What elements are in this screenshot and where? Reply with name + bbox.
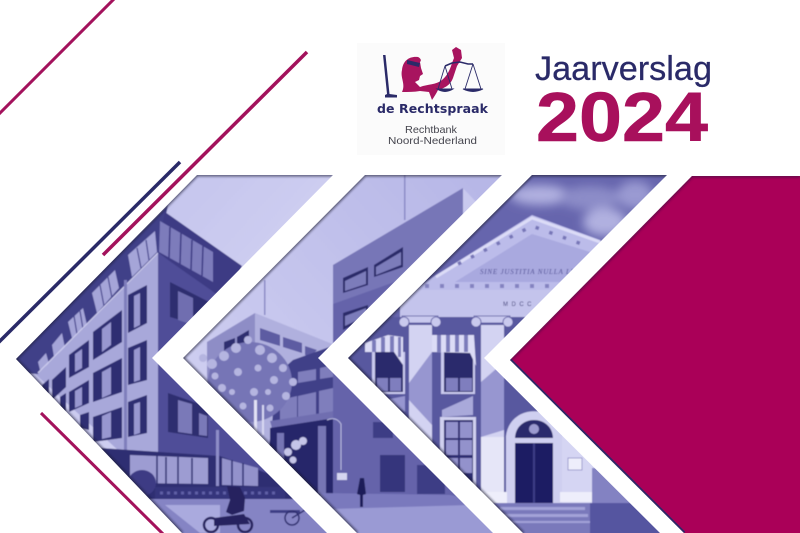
inscription: SINE JUSTITIA NULLA LIBERTAS [480, 268, 603, 276]
right dark bush [592, 468, 632, 504]
pediment [400, 215, 640, 315]
pavement [150, 499, 340, 533]
low building shaded side [207, 313, 255, 440]
panel fill [510, 176, 800, 533]
right facade [157, 252, 269, 475]
photo panel: court building with tree [183, 175, 502, 533]
low building lit side [254, 313, 332, 444]
canopy [270, 411, 335, 428]
pedestrian [357, 478, 366, 507]
upper windows [375, 352, 473, 392]
icon: scales [437, 62, 483, 92]
decorative line: navy [0, 162, 180, 343]
upper window lower panes [377, 378, 472, 391]
fanlight [515, 420, 553, 438]
title: Jaarverslag: Jaarverslag [535, 50, 712, 88]
wall sign [568, 458, 582, 470]
roof band [158, 212, 242, 300]
inner shadow [348, 175, 667, 533]
step treads [495, 507, 590, 523]
right lower window panes [178, 400, 207, 436]
ground floor glazing [130, 455, 208, 484]
glazing mullions [157, 456, 243, 486]
decorative line: long magenta [103, 52, 307, 255]
decorative line: lower magenta [41, 413, 163, 533]
arched doorway surround [506, 411, 562, 505]
garage door one [380, 455, 405, 492]
column bases [483, 492, 592, 503]
magenta chevron panel [510, 176, 800, 533]
low building windows [260, 328, 317, 357]
lower window [444, 420, 473, 492]
road shadow [270, 510, 300, 513]
striped awnings [365, 335, 403, 365]
courthouse photo content [340, 170, 680, 533]
tall building panes [345, 252, 401, 326]
bicycle [285, 510, 305, 525]
antenna two [264, 280, 266, 315]
inner shadow [183, 175, 502, 533]
entablature [400, 290, 640, 317]
date inscription: MDCC [503, 302, 535, 308]
steps [470, 503, 600, 533]
left facade window panes [75, 293, 140, 439]
dentil row [425, 284, 570, 288]
court photo content [183, 175, 502, 533]
logo wordmark: de Rechtspraak [377, 101, 489, 116]
structure upper windows [280, 365, 333, 421]
sky [340, 170, 680, 533]
roof glass mullions [169, 227, 203, 276]
door centre line [533, 443, 535, 503]
dormer glass [38, 231, 157, 370]
right upper window [170, 282, 208, 320]
ground floor band [100, 448, 293, 500]
left facade windows [42, 285, 147, 442]
wall light patches [442, 396, 473, 417]
fanlight centre [529, 424, 539, 434]
right wall [562, 430, 652, 505]
dormer mullions [74, 240, 149, 334]
wall sign [337, 473, 347, 480]
ground floor glazing right [222, 458, 258, 486]
street level [590, 503, 660, 533]
column shading [409, 352, 504, 437]
office photo content [0, 170, 340, 533]
hedge light speckle [160, 492, 278, 494]
tree [199, 336, 297, 440]
columns [409, 325, 504, 525]
downpipe [124, 280, 127, 455]
roof glass [159, 221, 213, 282]
left facade [36, 254, 158, 452]
clouds [510, 181, 653, 236]
inner shadow [16, 175, 333, 533]
photo panel: modern office building [0, 170, 340, 533]
photo panel: historic courthouse [340, 170, 680, 533]
pediment cornice [436, 218, 600, 277]
eave line [38, 253, 158, 373]
sky [30, 175, 333, 450]
cobbled ground [330, 505, 520, 533]
ground [320, 493, 520, 533]
door [515, 443, 553, 503]
logo subtitle line two: Noord-Nederland [388, 135, 477, 147]
scooter rider [204, 486, 252, 532]
tall building windows [343, 247, 403, 330]
panel navy lower edge [510, 360, 684, 533]
dark sphere bush [128, 470, 156, 496]
brick wall [340, 317, 640, 533]
left wall light patch [385, 396, 405, 412]
right lower window [168, 393, 208, 438]
sky [183, 175, 502, 382]
decorative line: top-left magenta [0, 0, 115, 115]
logo: de Rechtspraak [357, 43, 505, 155]
tall building upper [333, 188, 473, 310]
icon: blindfold [407, 60, 420, 67]
tall building lower [333, 255, 520, 533]
panel upper shadow [510, 176, 800, 360]
tall building top light return [450, 188, 478, 240]
antenna [404, 175, 406, 220]
upper windows frames [372, 352, 475, 394]
icon: sword [383, 55, 397, 98]
logo background [357, 43, 505, 155]
hedge [156, 488, 284, 498]
ground level windows [373, 422, 393, 438]
street lamp [327, 419, 341, 470]
pediment tympanum [455, 234, 600, 282]
lower window panes [446, 422, 472, 473]
column drainpipe [216, 430, 219, 486]
pavement light [165, 505, 220, 533]
column capitals [399, 316, 513, 327]
low building dark windows [224, 330, 249, 353]
dormer band [0, 205, 168, 374]
icon: justice figure [402, 47, 462, 100]
logo subtitle line one: Rechtbank [405, 124, 458, 136]
title: year 2024: 2024 [536, 78, 708, 156]
lower window frame [440, 417, 476, 495]
right upper window pane [178, 291, 193, 325]
awning stripes [372, 335, 468, 357]
garage door two [417, 465, 445, 494]
modillions [458, 226, 590, 264]
entrance columns [277, 426, 326, 494]
dark entrance [270, 418, 335, 496]
dark structure [262, 345, 335, 495]
small branch [284, 437, 307, 464]
column lower light [481, 437, 504, 497]
